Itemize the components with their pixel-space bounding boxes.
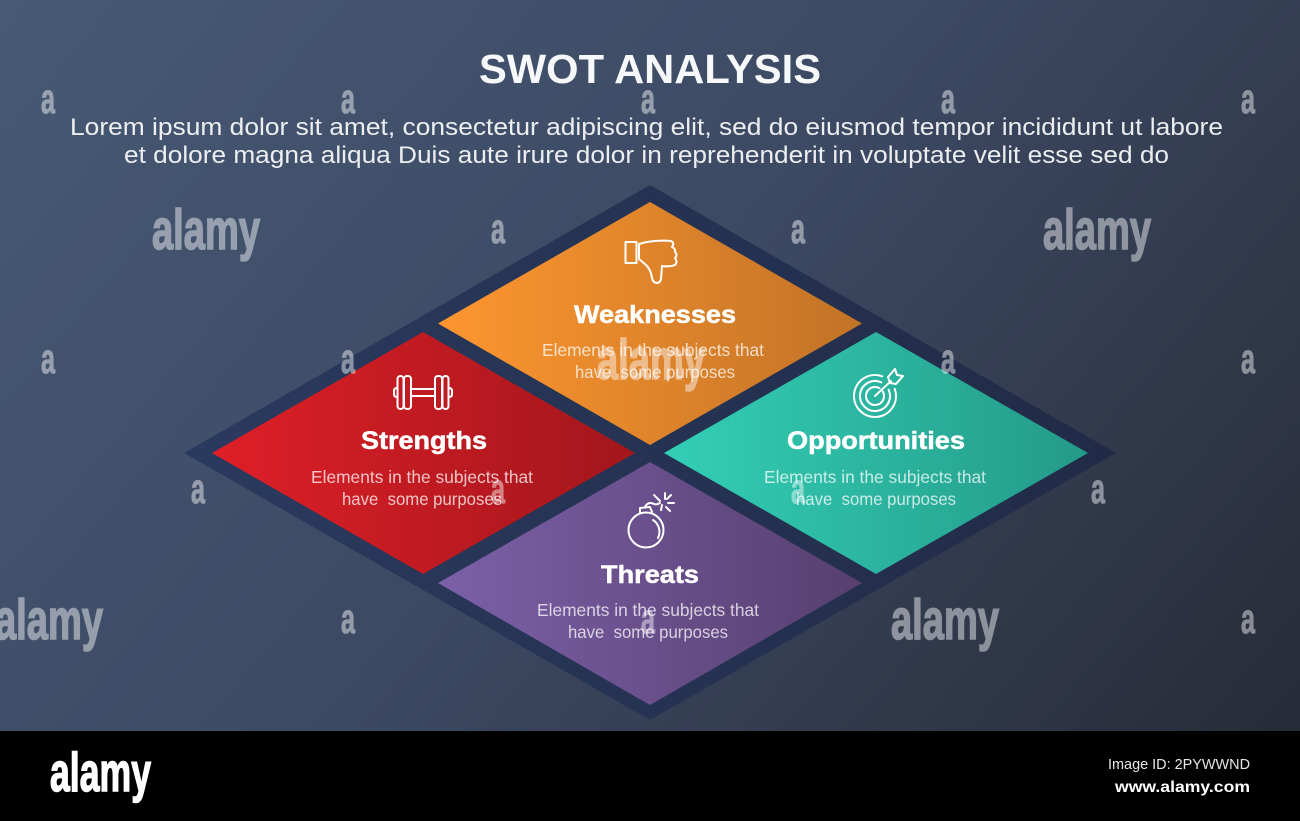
footer band bbox=[0, 731, 1300, 821]
watermarks: a bbox=[1241, 335, 1255, 382]
watermarks: a bbox=[641, 75, 655, 122]
website: www.alamy.com bbox=[1114, 779, 1250, 796]
watermarks: a bbox=[41, 75, 55, 122]
watermarks: a bbox=[341, 75, 355, 122]
description: threats: Elements in the subjects that bbox=[537, 600, 759, 620]
watermarks: a bbox=[791, 465, 805, 512]
description: opportunities bbox=[764, 467, 986, 509]
description: threats bbox=[537, 600, 759, 642]
title: SWOT ANALYSIS bbox=[479, 46, 821, 92]
watermarks: a bbox=[341, 595, 355, 642]
subtitle text block bbox=[70, 114, 1223, 169]
icon: bomb bbox=[628, 493, 674, 548]
heading: threats: Threats bbox=[601, 561, 699, 589]
watermarks: alamy bbox=[1043, 198, 1151, 262]
watermarks: a bbox=[941, 335, 955, 382]
watermarks: a bbox=[791, 205, 805, 252]
description: weaknesses bbox=[542, 340, 764, 382]
watermarks: alamy bbox=[597, 328, 705, 392]
subtitle text block: Lorem ipsum dolor sit amet, consectetur adipiscing elit, sed do eiusmod tempor incididunt ut labore bbox=[70, 114, 1223, 141]
watermarks: a bbox=[1241, 595, 1255, 642]
description: weaknesses: Elements in the subjects that bbox=[542, 340, 764, 360]
description: opportunities: have some purposes bbox=[796, 489, 956, 509]
heading: opportunities: Opportunities bbox=[787, 427, 965, 455]
watermarks: a bbox=[1241, 75, 1255, 122]
watermarks: a bbox=[491, 205, 505, 252]
watermarks: a bbox=[341, 335, 355, 382]
panel: strengths bbox=[212, 332, 635, 574]
description: weaknesses: have some purposes bbox=[575, 362, 735, 382]
icon: thumbs down bbox=[626, 241, 676, 283]
panel: weaknesses bbox=[438, 202, 862, 445]
panel: opportunities bbox=[664, 332, 1088, 574]
description: opportunities: Elements in the subjects that bbox=[764, 467, 986, 487]
watermarks: a bbox=[941, 75, 955, 122]
icon: target with arrow bbox=[854, 369, 903, 417]
panel: threats bbox=[438, 462, 862, 705]
subtitle text block: et dolore magna aliqua Duis aute irure dolor in reprehenderit in voluptate velit esse sed do bbox=[124, 142, 1169, 169]
description: strengths: Elements in the subjects that bbox=[311, 467, 533, 487]
watermarks: a bbox=[1091, 465, 1105, 512]
watermarks: alamy bbox=[891, 588, 999, 652]
heading: weaknesses: Weaknesses bbox=[574, 301, 736, 329]
icon: dumbbell bbox=[394, 376, 452, 409]
heading: strengths: Strengths bbox=[361, 427, 487, 455]
outer diamond frame bbox=[184, 185, 1116, 720]
watermarks: a bbox=[41, 335, 55, 382]
watermarks: a bbox=[491, 465, 505, 512]
description: threats: have some purposes bbox=[568, 622, 728, 642]
watermarks: a bbox=[191, 465, 205, 512]
watermarks: alamy bbox=[152, 198, 260, 262]
watermarks: a bbox=[641, 595, 655, 642]
footer logo: alamy bbox=[50, 741, 151, 803]
description: strengths bbox=[311, 467, 533, 509]
watermarks bbox=[0, 75, 1255, 652]
description: strengths: have some purposes bbox=[342, 489, 502, 509]
image id: Image ID: 2PYWWND bbox=[1108, 756, 1250, 773]
